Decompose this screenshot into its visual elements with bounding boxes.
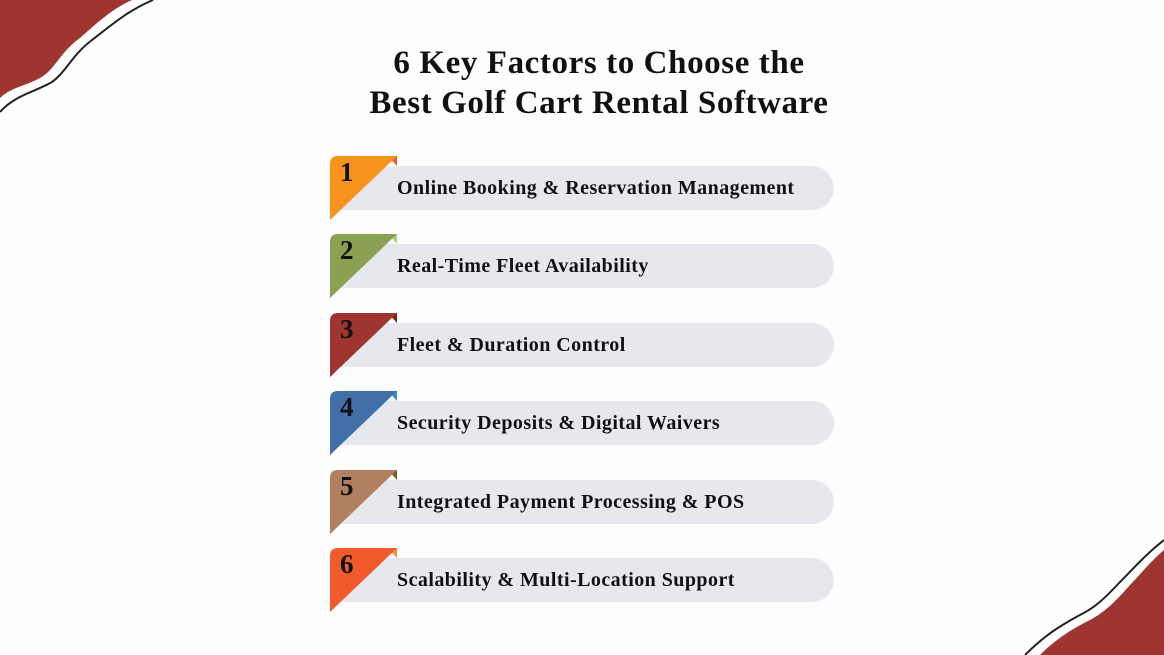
title: Best Golf Cart Rental Software (369, 85, 829, 121)
item 2 (330, 234, 834, 298)
item 2: Real-Time Fleet Availability (397, 255, 649, 277)
item 6: 6 (340, 549, 354, 579)
badge 3 (330, 313, 397, 377)
item 5 (330, 470, 834, 534)
decoration: bottom-right corner wave (1024, 539, 1164, 655)
item 1: Online Booking & Reservation Management (397, 177, 795, 199)
item 4: 4 (340, 392, 354, 422)
item 3: Fleet & Duration Control (397, 334, 626, 356)
decoration: top-left corner wave (0, 0, 154, 113)
item 6: Scalability & Multi-Location Support (397, 569, 735, 591)
title: 6 Key Factors to Choose the (393, 45, 805, 81)
item 4: Security Deposits & Digital Waivers (397, 412, 720, 434)
item 6 (330, 548, 834, 612)
badge 6 (330, 548, 397, 612)
badge 2 (330, 234, 397, 298)
badge 4 (330, 391, 397, 455)
item 3 (330, 313, 834, 377)
badge 1 (330, 156, 397, 220)
item 1: 1 (340, 157, 354, 187)
item 3: 3 (340, 314, 354, 344)
badge 5 (330, 470, 397, 534)
item 5: Integrated Payment Processing & POS (397, 491, 745, 513)
title (369, 45, 829, 121)
item 2: 2 (340, 235, 354, 265)
item 5: 5 (340, 471, 354, 501)
item 1 (330, 156, 834, 220)
item 4 (330, 391, 834, 455)
